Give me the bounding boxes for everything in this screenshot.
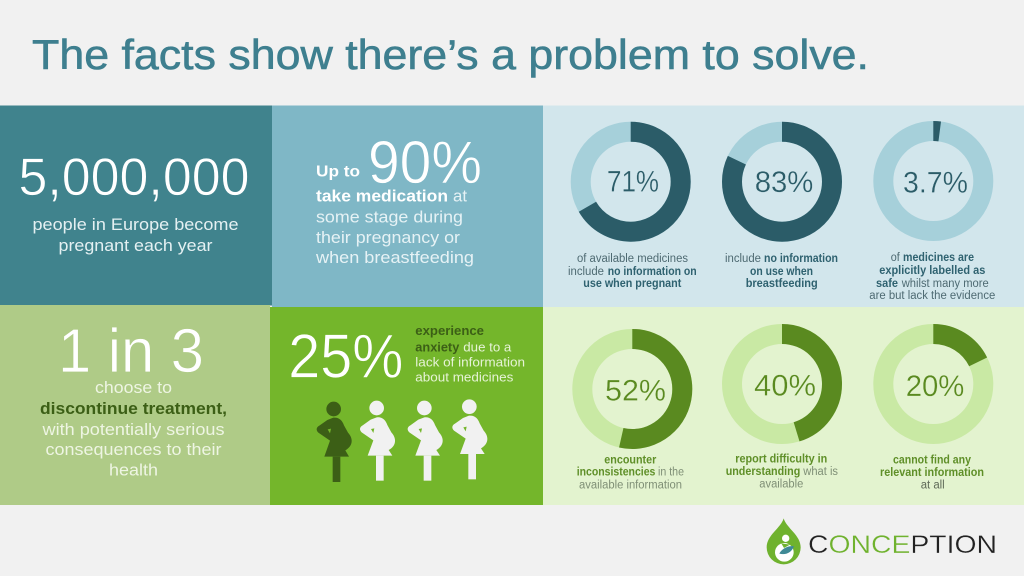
description — [415, 323, 525, 385]
description: due to a — [463, 340, 512, 355]
logo: Conception — [767, 518, 997, 564]
caption: 71%: use when pregnant — [583, 278, 681, 290]
donut: 71% — [581, 132, 681, 232]
donut: 40%: 40% — [754, 370, 816, 403]
caption: 20%: cannot find any — [893, 454, 972, 466]
caption: 3.7%: of — [891, 252, 900, 264]
icon: highlighted figure — [317, 402, 352, 482]
icon: figure 3 — [408, 401, 443, 481]
donut: 71%: 71% — [607, 166, 659, 199]
big number: 1 in 3 — [58, 317, 204, 386]
big percentage: 25% — [288, 323, 403, 392]
description: discontinue treatment, — [40, 399, 227, 418]
icon: figure 4 — [452, 399, 487, 479]
donut: 20%: 20% — [906, 370, 964, 403]
panel: 1 in 3 — [0, 305, 270, 505]
donut: 83% — [732, 132, 832, 232]
description: experience — [415, 323, 484, 338]
donut: 20% — [883, 334, 983, 434]
icon: droplet with mother and child — [767, 518, 801, 564]
caption: 40%: available — [759, 479, 803, 491]
panel: information difficulty statistics — [543, 307, 1024, 505]
big percentage: 90% — [368, 129, 482, 196]
donut: 83%: 83% — [755, 166, 813, 199]
caption: 83% — [725, 253, 838, 290]
caption: 3.7%: safe — [876, 278, 898, 290]
description: with potentially serious — [41, 420, 224, 439]
description — [32, 215, 239, 255]
caption: 20%: relevant information — [880, 467, 984, 479]
description: when breastfeeding — [315, 248, 474, 267]
panel: up to 90% — [272, 106, 543, 308]
caption: 3.7%: medicines are — [903, 252, 974, 264]
caption: 52%: inconsistencies — [577, 467, 655, 479]
caption: 83%: no information — [764, 253, 838, 265]
caption: 52%: in the — [658, 467, 684, 479]
title: The facts show there’s a problem to solve. — [32, 31, 869, 78]
caption: 83%: on use when — [750, 266, 813, 278]
caption: 3.7%: are but lack the evidence — [869, 290, 995, 302]
description: pregnant each year — [58, 236, 213, 255]
caption: 71%: no information on — [608, 266, 697, 278]
description: consequences to their — [46, 440, 222, 459]
caption: 71%: of available medicines — [577, 253, 688, 265]
caption: 3.7% — [869, 252, 995, 302]
description — [40, 378, 227, 480]
panel: 25% anxiety — [270, 307, 543, 505]
donut: 3.7% — [883, 131, 983, 231]
description: about medicines — [415, 370, 514, 385]
caption: 40%: report difficulty in — [735, 454, 827, 466]
big number: 5,000,000 — [18, 148, 250, 207]
caption: 83%: include — [725, 253, 761, 265]
caption: 40%: what is — [802, 466, 838, 478]
description: their pregnancy or — [316, 228, 460, 247]
caption: 3.7%: whilst many more — [901, 278, 989, 290]
wordmark: CONCE PTION — [808, 531, 997, 559]
caption: 20% — [880, 454, 984, 491]
donut: 3.7%: 3.7% — [903, 167, 968, 200]
caption: 52%: available information — [579, 479, 682, 491]
description: at — [453, 187, 467, 206]
donut: 40% — [732, 334, 832, 434]
caption: 20%: at all — [921, 479, 945, 491]
caption: 71%: include — [568, 266, 604, 278]
description: anxiety — [415, 340, 460, 355]
up to label: Up to — [316, 164, 360, 181]
description: take medication — [316, 187, 448, 206]
donut: 52%: 52% — [605, 375, 666, 408]
caption: 40%: understanding — [726, 466, 800, 478]
panel: medicine labelling statistics — [543, 106, 1024, 308]
caption: 40% — [726, 454, 838, 491]
description: some stage during — [316, 208, 463, 227]
caption: 3.7%: explicitly labelled as — [879, 265, 985, 277]
description: health — [109, 460, 158, 480]
caption: 52% — [577, 454, 684, 491]
panel: 5,000,000 people — [0, 106, 272, 306]
icon: figure 2 — [360, 401, 395, 481]
description: lack of information — [415, 355, 525, 370]
caption: 71% — [568, 253, 697, 290]
description — [315, 187, 474, 267]
icon: pregnant figures, one in four highlighted — [317, 399, 487, 482]
caption: 52%: encounter — [604, 454, 657, 466]
description: choose to — [95, 378, 172, 397]
donut: 52% — [582, 339, 682, 439]
caption: 83%: breastfeeding — [746, 278, 818, 290]
description: people in Europe become — [32, 215, 239, 234]
